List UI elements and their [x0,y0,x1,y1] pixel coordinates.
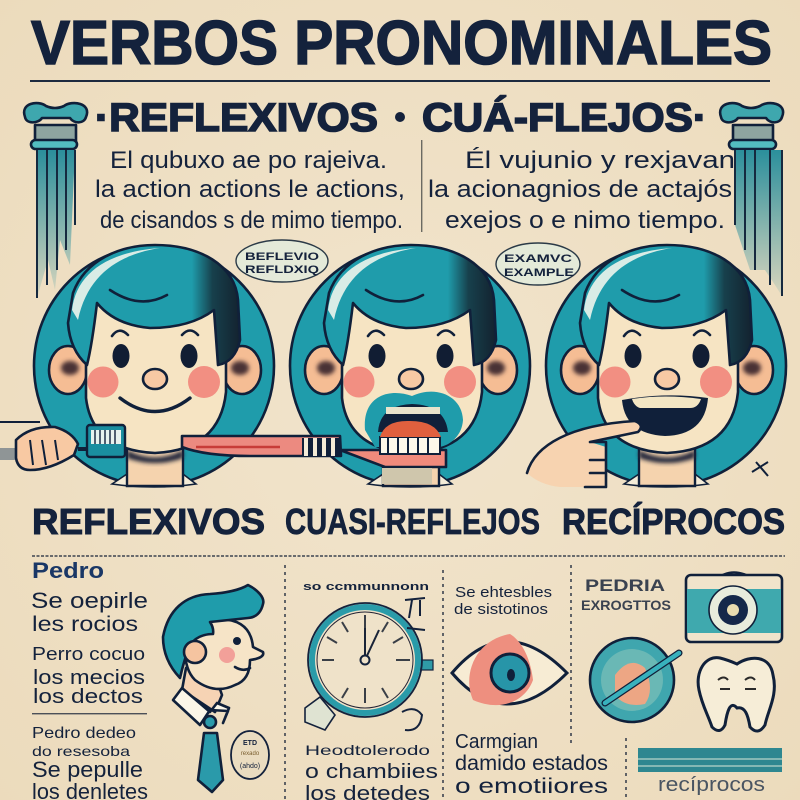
left column text: Pedro [32,558,104,583]
character in profile [163,585,263,792]
eye column text: o emotiiores [455,775,608,798]
face 1: smiling [34,245,274,487]
toothbrush in hand [0,422,125,470]
small badge: (ahdo) [240,763,260,770]
definition text: left: El qubuxo ae po rajeiva. [110,147,387,174]
label bubble: reflexivo: REFLDXIQ [245,264,320,276]
clock text: so ccmmunnonn [303,581,429,593]
label bubble: reflexivo: BEFLEVIO [245,251,320,263]
face 2: brushing [290,245,530,487]
crossed circle icon [590,638,679,722]
eye column heading [454,584,552,618]
reciprocal heading: EXROGTTOS [581,597,671,613]
clock column text: o chambiies [305,761,438,783]
doodle [752,462,768,476]
definition text: right: exejos o e nimo tiempo. [445,207,725,234]
left column text: los mecios [33,667,145,689]
clock column text [305,742,438,800]
definition text: right: la acionagnios de actajós [428,176,732,203]
eye column text: damido estados [455,752,608,775]
label bubble: example: EXAMPLE [504,267,574,279]
left column text: los dectos [33,686,143,708]
label bubble: reflexivo [236,240,328,282]
section heading: reciprocos: RECÍPROCOS [562,501,785,542]
definition text: left: la action actions le actions, [95,176,405,203]
subtitle: cuasi-reflejos: CUÁ-FLEJOS· [422,95,707,140]
long toothbrush [182,421,446,484]
definition text: left [95,147,405,234]
left column text: Se pepulle [32,757,143,782]
camera icon [686,572,782,642]
left column text: Pedro dedeo [32,725,136,742]
tooth icon [698,658,774,731]
left column text [31,558,148,800]
eye column text: Carmgian [455,731,538,753]
left column text: do resesoba [32,743,130,759]
reciprocal caption: recíprocos [658,774,765,796]
clock icon [305,598,433,730]
clock column text: Heodtolerodo [305,742,430,758]
subtitle separator [395,112,405,122]
small badge: rexado [241,751,260,757]
column right [720,103,783,296]
reciprocal heading: PEDRIA [585,576,665,595]
small badge [231,731,269,779]
definition text: right: Él vujunio y rexjavan [465,147,735,174]
label bubble: example [496,243,580,285]
reciprocal heading [581,576,671,613]
column left [24,103,87,298]
label bubble: example: EXAMVC [504,253,572,265]
left column text: les rocios [32,613,138,636]
eye icon [452,634,567,705]
definition text: right [428,147,735,234]
pointing hand [527,421,641,487]
small badge: ETD [243,740,257,747]
left column text: Perro cocuo [32,644,145,664]
title: VERBOS PRONOMINALES [31,9,772,78]
section heading: reflexivos: REFLEXIVOS [32,501,265,542]
subtitle: reflexivos: ·REFLEXIVOS [95,96,378,140]
face 3: open mouth [546,245,786,487]
left column text: Se oepirle [31,588,148,613]
eye column heading: de sistotinos [454,601,548,618]
section heading: cuasi-reflejos: CUASI-REFLEJOS [285,501,540,542]
striped bar [638,748,782,772]
definition text: left: de cisandos s de mimo tiempo. [100,207,403,234]
eye column text [455,731,608,798]
eye column heading: Se ehtesbles [455,584,552,601]
